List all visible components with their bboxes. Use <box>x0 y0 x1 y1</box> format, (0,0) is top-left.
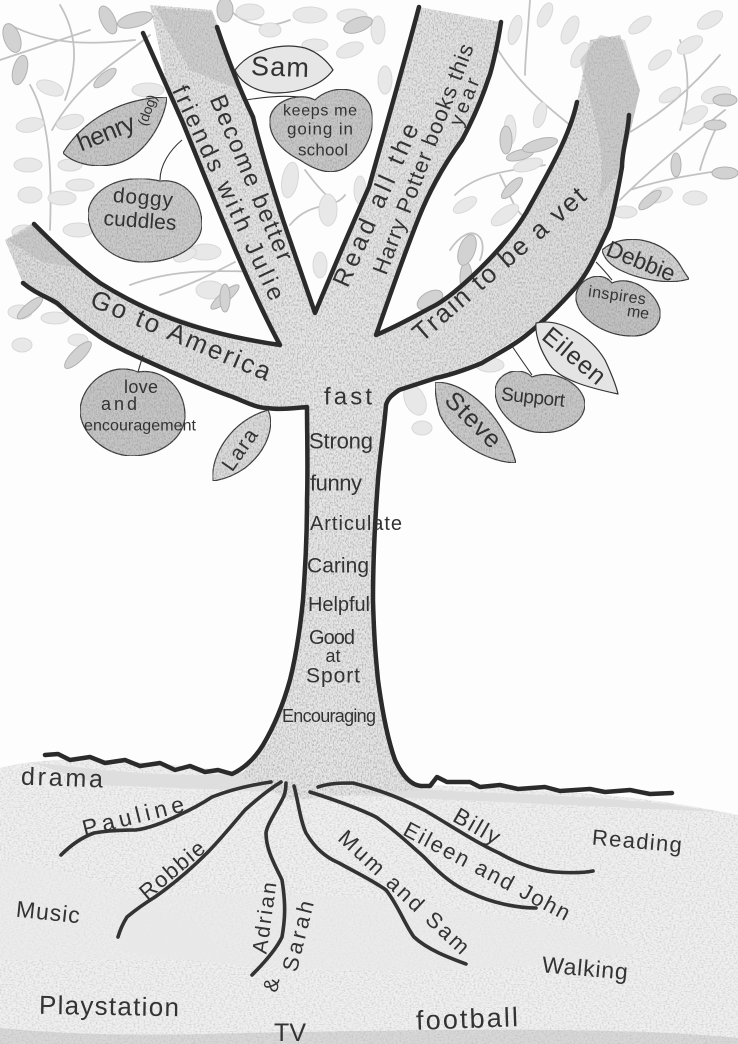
trunk labels: strengths: Good <box>309 627 355 649</box>
leaf: Eileen: Eileen <box>537 321 611 391</box>
trunk labels: strengths: Caring <box>307 554 369 578</box>
apple: love and encouragement: and <box>101 394 137 414</box>
apple: keeps me going in school: going in <box>287 120 353 138</box>
ground labels: interests <box>15 763 683 1044</box>
ground labels: interests: football <box>416 1002 518 1036</box>
trunk labels: strengths: fast <box>324 384 372 410</box>
branch label: Go to America: Go to America <box>86 283 276 387</box>
root: Pauline: Pauline <box>79 791 187 841</box>
branch label: Read all the: Read all the <box>327 119 425 291</box>
root: Adrian and Sarah <box>249 783 319 994</box>
apple: inspires me: me <box>626 303 650 323</box>
root: Pauline <box>61 782 271 855</box>
leaf: Steve: Steve <box>439 386 507 454</box>
root: Mum and Sam: Mum and Sam <box>333 825 475 959</box>
light background leaves <box>8 1 733 435</box>
background twigs <box>0 0 725 295</box>
ground labels: interests: drama <box>21 763 104 793</box>
tree outline <box>23 7 672 794</box>
ground labels: interests: Music <box>15 896 81 928</box>
trunk labels: strengths: Sport <box>306 664 360 688</box>
root: Eileen and John: Eileen and John <box>399 817 575 925</box>
root: Adrian and Sarah: Sarah <box>277 898 319 974</box>
background foliage <box>0 0 738 435</box>
apple: Support <box>495 346 585 433</box>
apple: keeps me going in school <box>246 89 372 172</box>
leaf: Debbie: Debbie <box>603 235 679 287</box>
leaf: henry (dog): henry <box>73 109 140 157</box>
branch label: Become better: Become better <box>204 91 298 265</box>
apple: inspires me: inspires <box>587 284 647 308</box>
trunk labels: strengths: Articulate <box>310 513 402 535</box>
branch label: friends with Julie: friends with Julie <box>166 81 290 305</box>
ground <box>0 760 738 1044</box>
trunk labels: strengths: at <box>326 646 340 666</box>
branch shading <box>8 8 640 268</box>
trunk labels: strengths: Helpful <box>308 594 370 616</box>
apple: love and encouragement <box>80 355 197 456</box>
darker background leaves <box>0 0 738 372</box>
branch label: Train to be a vet: Train to be a vet <box>406 180 592 347</box>
root: Adrian and Sarah: & <box>259 976 285 994</box>
apple: keeps me going in school: school <box>298 140 348 160</box>
root: Billy: Billy <box>449 802 506 850</box>
root: Adrian and Sarah: Adrian <box>249 881 281 955</box>
apple: doggy cuddles <box>88 140 202 262</box>
root: Robbie: Robbie <box>134 835 210 905</box>
branch label: Harry Potter books this: Harry Potter books this <box>367 40 479 278</box>
leaf: Lara <box>213 410 271 481</box>
apple: inspires me <box>576 262 660 336</box>
leaf: Sam: Sam <box>250 51 310 83</box>
trunk labels: strengths: Encouraging <box>282 706 376 726</box>
apple: doggy cuddles: cuddles <box>103 207 177 235</box>
root: Eileen and John <box>310 792 575 925</box>
apple: keeps me going in school: keeps me <box>283 102 357 120</box>
apple: love and encouragement: encouragement <box>84 418 197 434</box>
tree trunk and branches <box>5 5 640 800</box>
leaf: Lara: Lara <box>217 424 263 475</box>
ground labels: interests: Playstation <box>39 990 179 1022</box>
trunk labels: strengths <box>282 384 402 726</box>
apple: Support: Support <box>500 384 567 412</box>
root: Billy <box>318 783 593 873</box>
ground labels: interests: Walking <box>541 951 629 985</box>
apple: love and encouragement: love <box>124 377 158 397</box>
leaf: henry (dog): (dog) <box>134 92 160 128</box>
ground labels: interests: Reading <box>591 825 683 857</box>
apple: doggy cuddles: doggy <box>112 184 174 212</box>
leaf: henry (dog) <box>63 92 167 166</box>
branch label: year: year <box>445 74 485 129</box>
root: Mum and Sam <box>294 786 475 964</box>
trunk labels: strengths: Strong <box>309 428 373 454</box>
root: Robbie <box>118 782 281 937</box>
leaf: Sam <box>235 46 333 93</box>
trunk labels: strengths: funny <box>310 470 362 496</box>
